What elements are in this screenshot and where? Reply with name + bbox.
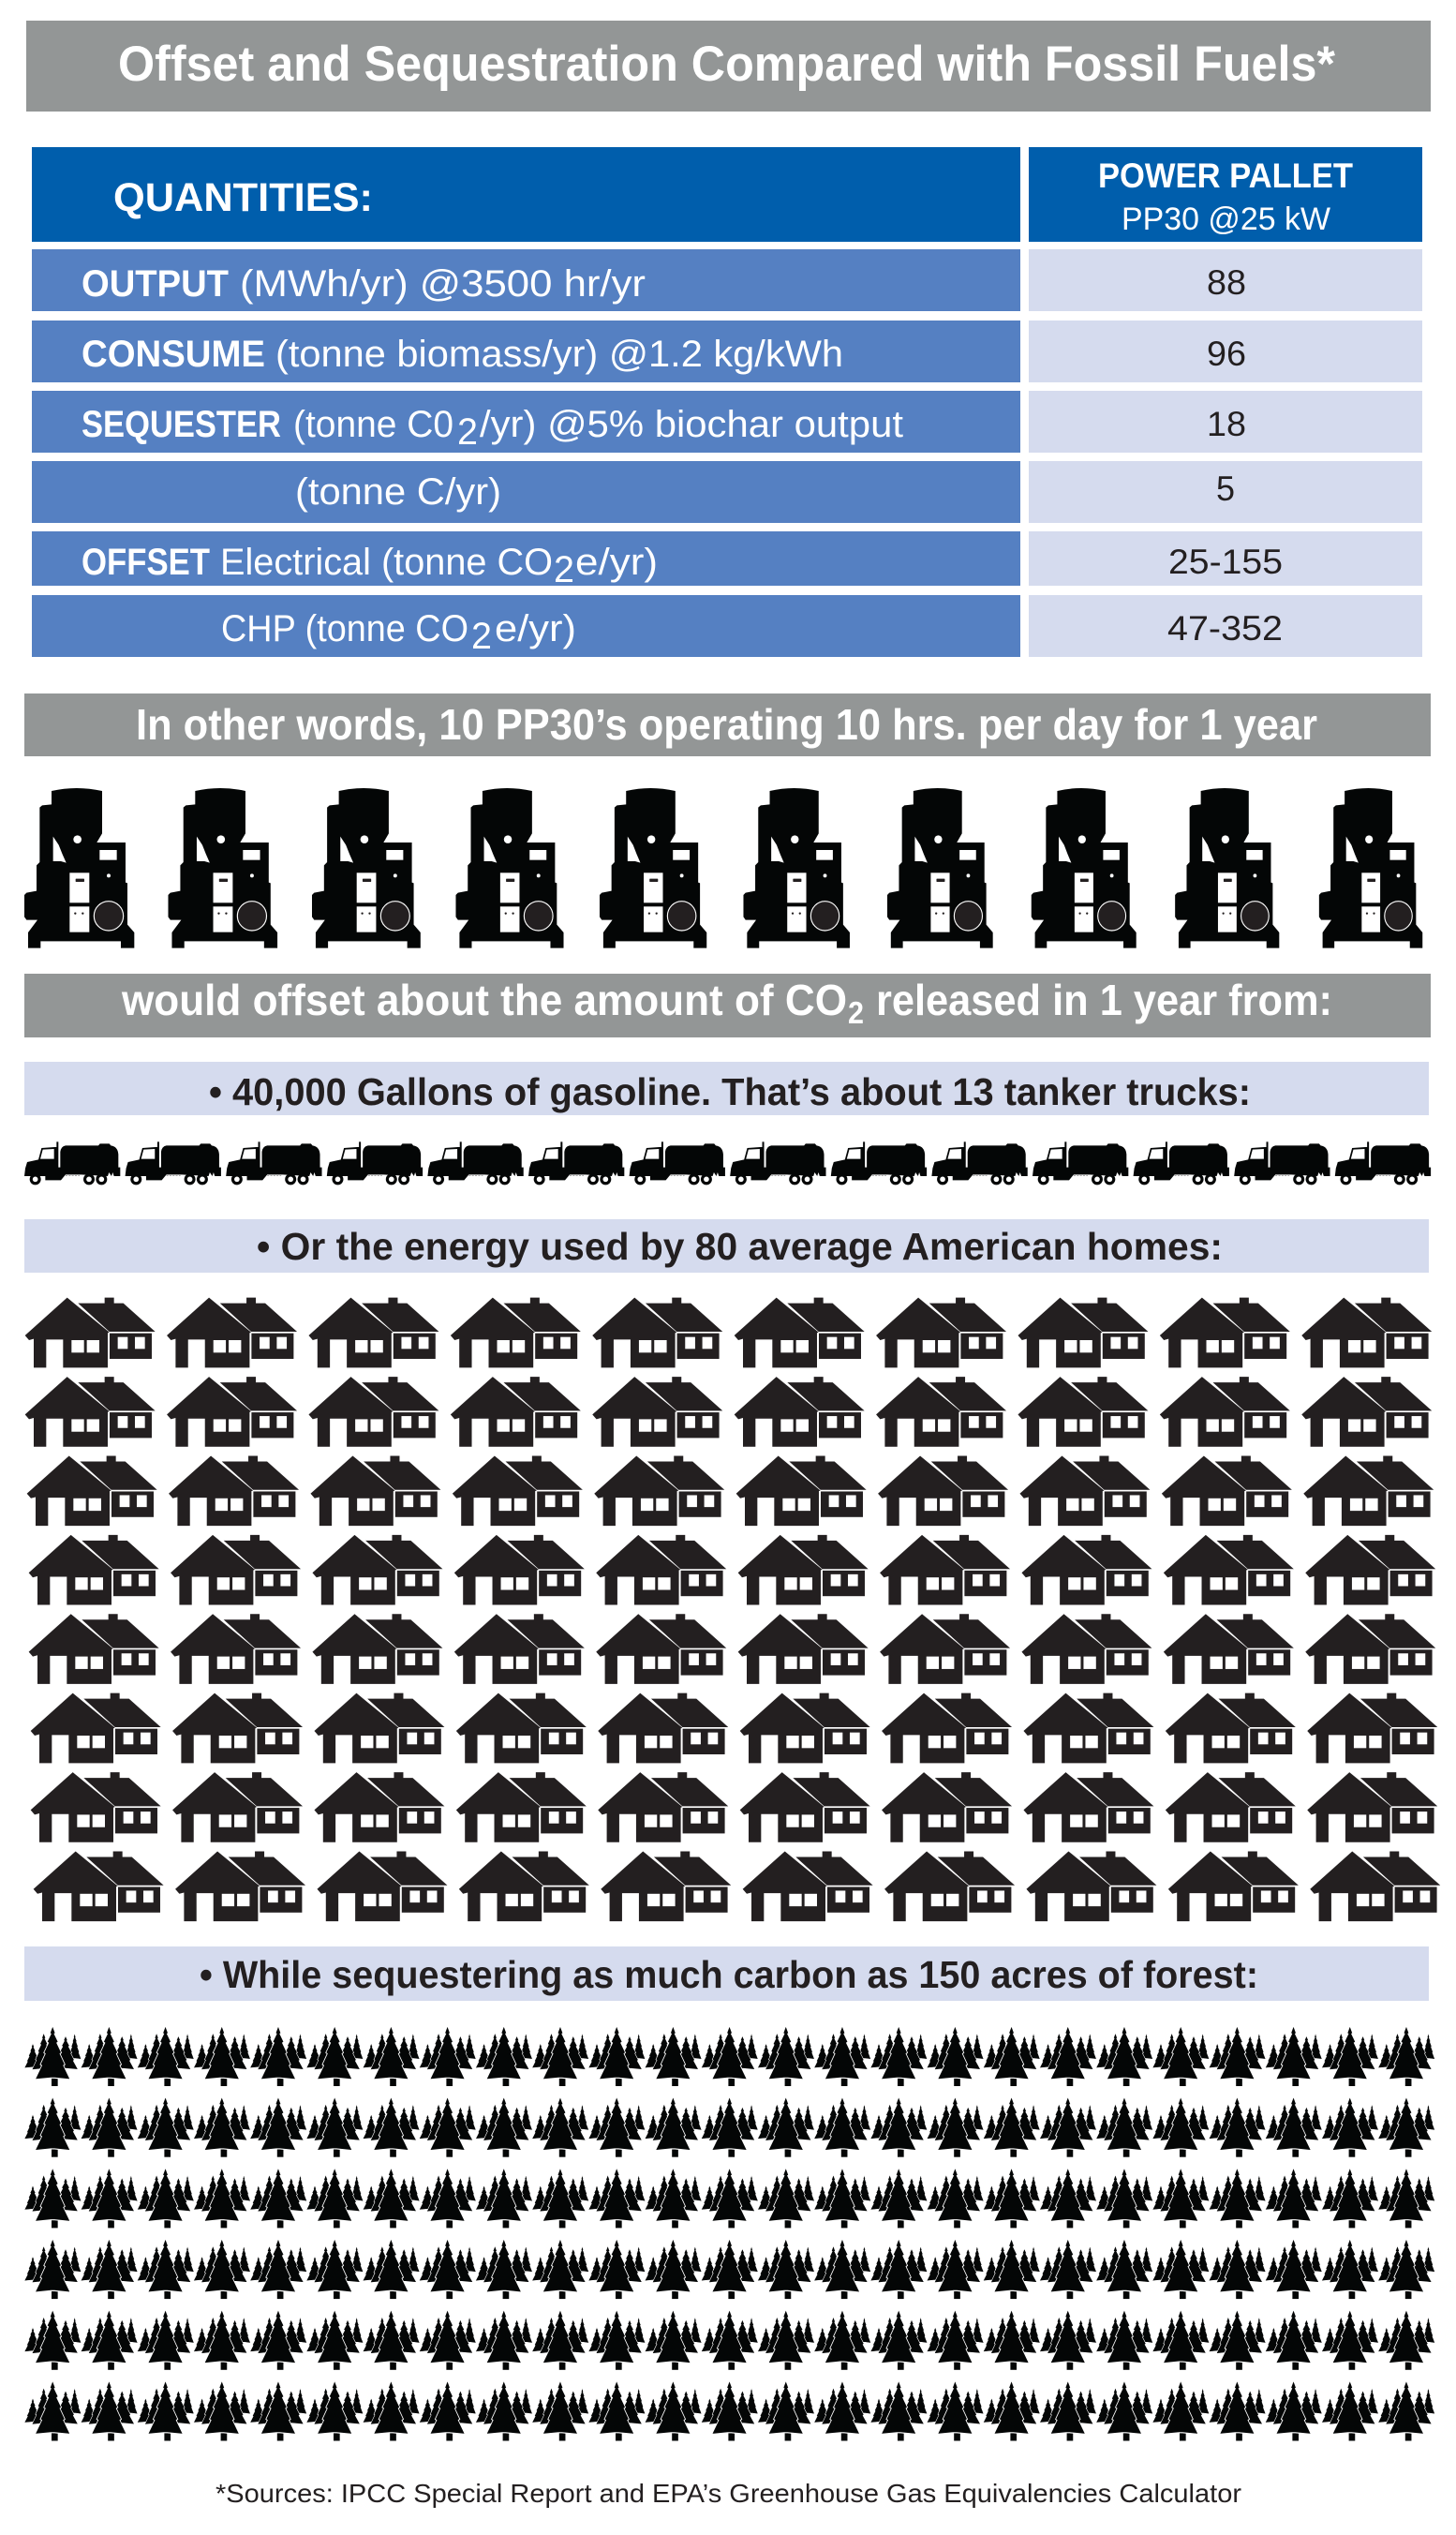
row: output: (MWh/yr) @3500 hr/yr (240, 263, 646, 305)
sources footnote: *Sources: IPCC Special Report and EPA’s Greenhouse Gas Equivalencies Calculator (215, 2479, 1241, 2508)
banner: would offset: would offset about the amount of CO (121, 976, 847, 1024)
row: consume: CONSUME (82, 334, 265, 375)
table header: QUANTITIES: (113, 175, 373, 220)
title banner (26, 21, 1431, 112)
row: sequester CO2: 2 (457, 411, 478, 453)
row: offset CHP: 2 (471, 616, 492, 657)
icon grid: 80 houses (25, 1298, 1440, 1921)
row: offset electrical: e/yr) (575, 542, 658, 583)
table header: PP30 @25 kW (1122, 201, 1330, 237)
row: sequester C: (tonne C/yr) (295, 471, 501, 513)
table header (32, 147, 1422, 242)
row: output (32, 249, 1422, 311)
row: consume: 96 (1207, 335, 1246, 373)
row: output: OUTPUT (82, 263, 229, 305)
banner: in other words (24, 693, 1431, 756)
row: offset electrical: Electrical (tonne CO (220, 542, 553, 583)
heading: gasoline tanker trucks: • 40,000 Gallons of gasoline. That’s about 13 tanker trucks: (209, 1070, 1251, 1113)
title: Offset and Sequestration Compared with Fossil Fuels* (118, 37, 1335, 92)
row: sequester C (32, 461, 1422, 523)
row: sequester CO2: (tonne C0 (293, 404, 453, 445)
row: consume (32, 321, 1422, 382)
row: consume: (tonne biomass/yr) @1.2 kg/kWh (275, 334, 843, 375)
heading: American homes (24, 1219, 1429, 1273)
row: sequester CO2 (32, 391, 1422, 453)
row: output: 88 (1207, 263, 1246, 302)
row: offset CHP: CHP (tonne CO (221, 608, 468, 649)
row: sequester CO2: /yr) @5% biochar output (480, 404, 903, 445)
panel: quantities table (32, 147, 1422, 657)
heading: American homes: • Or the energy used by 80 average American homes: (257, 1225, 1223, 1268)
banner: in other words: In other words, 10 PP30’s operating 10 hrs. per day for 1 year (136, 700, 1317, 749)
row: offset CHP: e/yr) (495, 608, 576, 649)
row: sequester C: 5 (1216, 470, 1235, 508)
icon grid: 150 trees (24, 2026, 1434, 2440)
banner: would offset (24, 974, 1431, 1037)
row: offset electrical: OFFSET (82, 542, 210, 583)
row: offset electrical: 25-155 (1168, 543, 1283, 581)
heading: gasoline tanker trucks (24, 1062, 1429, 1115)
icon row: 10 power pallet machines (24, 788, 1422, 948)
banner: would offset: 2 (848, 995, 864, 1030)
icon row: 14 tanker trucks (24, 1141, 1431, 1185)
row: sequester CO2: SEQUESTER (82, 404, 281, 445)
row: offset electrical: 2 (554, 549, 574, 590)
row: offset electrical (32, 531, 1422, 590)
banner: would offset: released in 1 year from: (876, 976, 1332, 1024)
heading: acres of forest: • While sequestering as much carbon as 150 acres of forest: (200, 1953, 1258, 1996)
row: offset CHP: 47-352 (1167, 609, 1283, 648)
heading: acres of forest (24, 1946, 1429, 2001)
row: offset CHP (32, 595, 1422, 657)
row: sequester CO2: 18 (1207, 405, 1246, 443)
table header: POWER PALLET (1098, 157, 1353, 195)
